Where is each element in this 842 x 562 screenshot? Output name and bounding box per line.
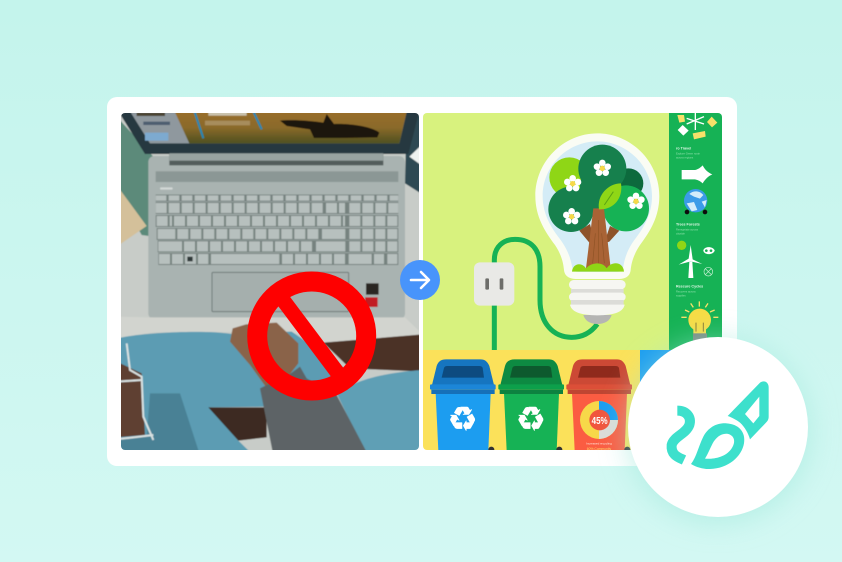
skin, right arm xyxy=(323,334,423,372)
book xyxy=(121,190,148,244)
red bin with donut chart: Increased recycling xyxy=(586,442,612,446)
small light bulb xyxy=(681,301,718,341)
keyboard xyxy=(156,198,398,259)
trunk xyxy=(579,224,591,242)
flowers xyxy=(563,160,645,224)
lime background xyxy=(423,113,670,350)
blue bin xyxy=(430,359,496,451)
panel: laptop photo xyxy=(117,109,423,455)
sparkle icons xyxy=(677,115,717,139)
light bulb with tree xyxy=(535,133,659,279)
recycling bins xyxy=(430,359,632,453)
green bin: ♻ xyxy=(516,400,546,439)
laptop base xyxy=(148,156,405,319)
grass xyxy=(572,263,624,272)
wall socket xyxy=(474,262,514,306)
prohibition sign xyxy=(257,282,366,390)
icon: paintbrush xyxy=(672,381,769,469)
white card xyxy=(107,97,737,466)
leaf xyxy=(599,183,621,209)
globe xyxy=(684,189,707,212)
red bin with donut chart: 60% Community xyxy=(587,447,612,451)
laptop screen xyxy=(117,109,420,154)
side panel: Rescure Cycles xyxy=(676,284,703,288)
side panel: Explore Green route xyxy=(676,151,700,155)
side panel xyxy=(669,110,722,352)
cushion below laptop xyxy=(117,317,423,343)
red bin with donut chart xyxy=(566,359,632,451)
small icons xyxy=(677,241,686,250)
donut chart: 45% xyxy=(592,416,608,427)
foliage xyxy=(549,157,582,192)
side panel: across regions xyxy=(676,156,694,160)
green bin xyxy=(498,359,564,451)
panel: eco infographic xyxy=(420,110,740,457)
arrow icon xyxy=(682,165,712,183)
side panel: Recovers across xyxy=(676,289,696,293)
side panel: Trees Forests xyxy=(676,223,700,227)
section text: ro Travel xyxy=(676,147,691,151)
brush badge xyxy=(626,337,810,523)
arrow badge xyxy=(400,260,440,300)
teal cushion xyxy=(121,120,153,236)
yellow band xyxy=(420,350,640,457)
side panel: Revegetate across xyxy=(676,227,699,231)
bulb base xyxy=(569,280,626,324)
side panel: cityside xyxy=(676,232,685,236)
side panel: supplies xyxy=(676,294,686,298)
cord xyxy=(494,239,597,350)
jeans xyxy=(117,332,345,455)
ripped knee xyxy=(121,363,146,438)
wind turbine xyxy=(679,245,702,265)
speaker grille xyxy=(156,171,398,182)
hand xyxy=(230,323,298,388)
blue bin: ♻ xyxy=(448,400,478,439)
touchpad xyxy=(212,272,349,312)
sweater xyxy=(260,367,368,455)
stickers xyxy=(366,283,379,295)
